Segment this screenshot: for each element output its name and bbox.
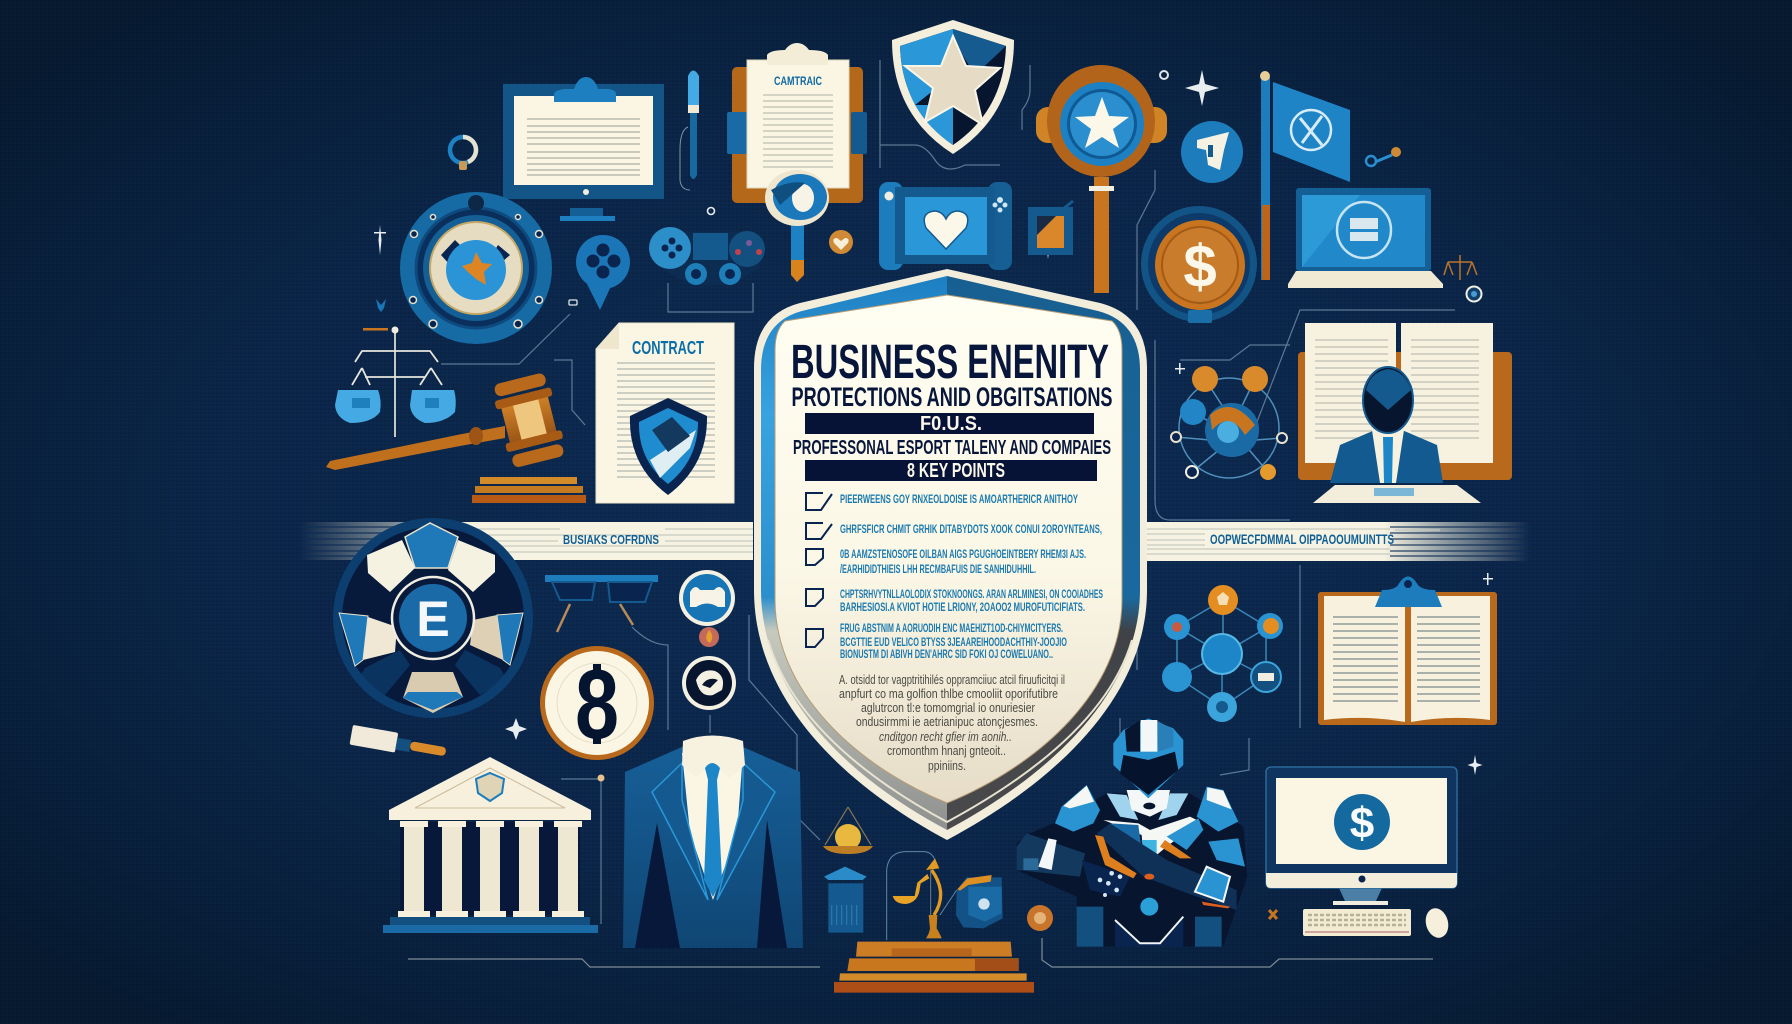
icon: balance scale bbox=[335, 326, 456, 437]
panel: contract document bbox=[596, 323, 734, 503]
icon: hanging balance and gold orb bbox=[823, 807, 873, 854]
icon: laptop bbox=[1288, 188, 1443, 288]
icon: picture frame bbox=[1028, 201, 1073, 255]
icon: contract clipboard: CAMTRAIC bbox=[774, 74, 822, 88]
icon: blue pouch bbox=[940, 875, 1003, 928]
panel: left banner bbox=[300, 522, 753, 560]
icon: wooden podium bbox=[834, 942, 1034, 993]
icon: mouse bbox=[1422, 906, 1452, 940]
closing paragraph: A. otsidd tor vagptritihilés oppramciiuc atcil firuuficitqi il bbox=[839, 673, 1065, 687]
closing paragraph: aglutrcon tl:e tomomgrial io onuriesier bbox=[861, 701, 1035, 715]
checkbox list: PIEERWEENS GOY RNXEOLDOISE IS AMOARTHERICR ANITHOY bbox=[840, 494, 1078, 506]
icon: star shield bbox=[892, 20, 1014, 154]
subtitle bar: for U.S. bbox=[805, 413, 1094, 435]
icon: glasses bbox=[545, 575, 658, 632]
icon: round swirl logo bbox=[682, 656, 736, 710]
icon: monitor with clipboard page bbox=[503, 77, 664, 221]
icon: contract shield bbox=[630, 398, 707, 495]
closing paragraph: ondusirmmi ie aetrianipuc atonçjesmes. bbox=[856, 715, 1038, 729]
icon: business suit bbox=[623, 736, 803, 948]
icon: desktop monitor with dollar bbox=[1266, 767, 1457, 905]
icon: dollar badge: $ bbox=[1183, 233, 1217, 300]
icon: number eight ball bbox=[540, 646, 654, 760]
checkbox list: BIONUSTM DI ABIVH DEN'AHRC SID FOKI OJ COWELUANO.. bbox=[840, 649, 1053, 661]
icon: blue lantern post bbox=[824, 867, 867, 933]
icon: courthouse temple bbox=[383, 757, 604, 933]
icon: blue circle glyph bbox=[1181, 121, 1243, 183]
circuit connector lines bbox=[408, 60, 1455, 967]
closing paragraph: cromonthm hnanj gnteoit.. bbox=[887, 744, 1006, 758]
icon: game controller bbox=[649, 227, 765, 285]
checkbox list: BCGTTIE EUD VELICO BTYSS 3JEAAREIHOODACHTHIY-JOOJIO bbox=[840, 637, 1067, 649]
checkbox list: CHPTSRHVYTNLLAOLODIX STOKNOONGS. ARAN ARLMINESI, ON COOIADHES bbox=[840, 589, 1103, 601]
panel: right banner bbox=[1146, 522, 1530, 561]
icon: dollar badge bbox=[1141, 206, 1257, 323]
checkbox list: /EARHIDIDTHIEIS LHH RECMBAFUIS DIE SANHIDUHHIL. bbox=[840, 564, 1036, 576]
icon: gavel bbox=[326, 372, 586, 503]
closing paragraph bbox=[839, 673, 1065, 773]
icon: target ring bbox=[1466, 286, 1482, 302]
checkbox list: FRUG ABSTNIM A AORUODIH ENC MAEHIZT1OD-CHIYMCITYERS. bbox=[840, 623, 1063, 635]
icon: orange heart coin bbox=[829, 230, 853, 254]
icon: esports armored player bbox=[1017, 718, 1247, 947]
checkbox list: BARHESIOSI.A KVIOT HOTIE LRIONY, 2OAOO2 MUROFUTICIFIATS. bbox=[840, 602, 1085, 614]
icon: film reel speech bubble bbox=[576, 235, 630, 310]
icon: soccer ball E emblem: E bbox=[416, 591, 450, 647]
icon: flag bbox=[1260, 71, 1350, 280]
checkbox list bbox=[806, 493, 1103, 661]
closing paragraph: ppiniins. bbox=[928, 759, 966, 773]
closing paragraph: cnditgon recht gfier im aonih.. bbox=[879, 730, 1012, 744]
icon: mask badge bbox=[679, 570, 735, 647]
icon: orange round coin bbox=[1027, 905, 1053, 931]
checkbox list: 0B AAMZSTENOSOFE OILBAN AIGS PGUGHOEINTBERY RHEM3I AJS. bbox=[840, 549, 1086, 561]
small decorative sparkles and rings bbox=[374, 70, 1493, 919]
icon: node network cluster bbox=[1171, 366, 1287, 480]
subtitle bar: 8 key points bbox=[805, 460, 1097, 482]
banner label: BUSIAKS COFRDNS bbox=[563, 532, 659, 547]
icon: round shield dial bbox=[400, 192, 552, 344]
icon: contract clipboard bbox=[727, 43, 867, 203]
icon: atom network bbox=[1162, 585, 1283, 722]
icon: keyboard bbox=[1303, 909, 1411, 936]
icon: player profile with open book bbox=[1298, 323, 1512, 503]
subtitle: professional esports talent and companies: PROFESSONAL ESPORT TALENY AND COMPAIES bbox=[793, 437, 1111, 459]
panel: contract document: CONTRACT bbox=[632, 338, 704, 358]
icon: handheld console with heart bbox=[879, 182, 1012, 270]
icon: key bbox=[1366, 147, 1401, 166]
icon: small ring bbox=[450, 137, 476, 170]
icon: pen bbox=[680, 70, 699, 190]
icon: desktop monitor with dollar: $ bbox=[1350, 799, 1374, 848]
icon: number eight ball: 8 bbox=[575, 649, 619, 759]
title: PROTECTIONS ANID OBGITSATIONS bbox=[792, 382, 1112, 412]
subtitle bar: for U.S.: F0.U.S. bbox=[920, 413, 982, 435]
icon: small balance bbox=[1444, 255, 1477, 280]
icon: magnifier badge bbox=[765, 170, 829, 282]
closing paragraph: anpfurt co ma golfion thlbe cmooliit oporifutibre bbox=[839, 687, 1058, 701]
icon: small gavel tool bbox=[350, 725, 448, 761]
title: BUSINESS ENENITY bbox=[791, 336, 1109, 389]
subtitle bar: 8 key points: 8 KEY POINTS bbox=[907, 460, 1005, 482]
icon: soccer ball E emblem bbox=[333, 518, 533, 718]
checkbox list: GHRFSFICR CHMIT GRHIK DITABYDOTS XOOK CONUI 2OROYNTEANS, bbox=[840, 524, 1102, 536]
icon: golden scale bbox=[887, 852, 942, 940]
title bbox=[791, 336, 1112, 412]
banner label: OOPWECFDMMAL OIPPAOOUMUINTTS bbox=[1210, 531, 1394, 547]
icon: open book with clip bbox=[1318, 576, 1497, 725]
panel: central shield bbox=[754, 269, 1147, 840]
icon: star gavel badge bbox=[1036, 65, 1167, 293]
